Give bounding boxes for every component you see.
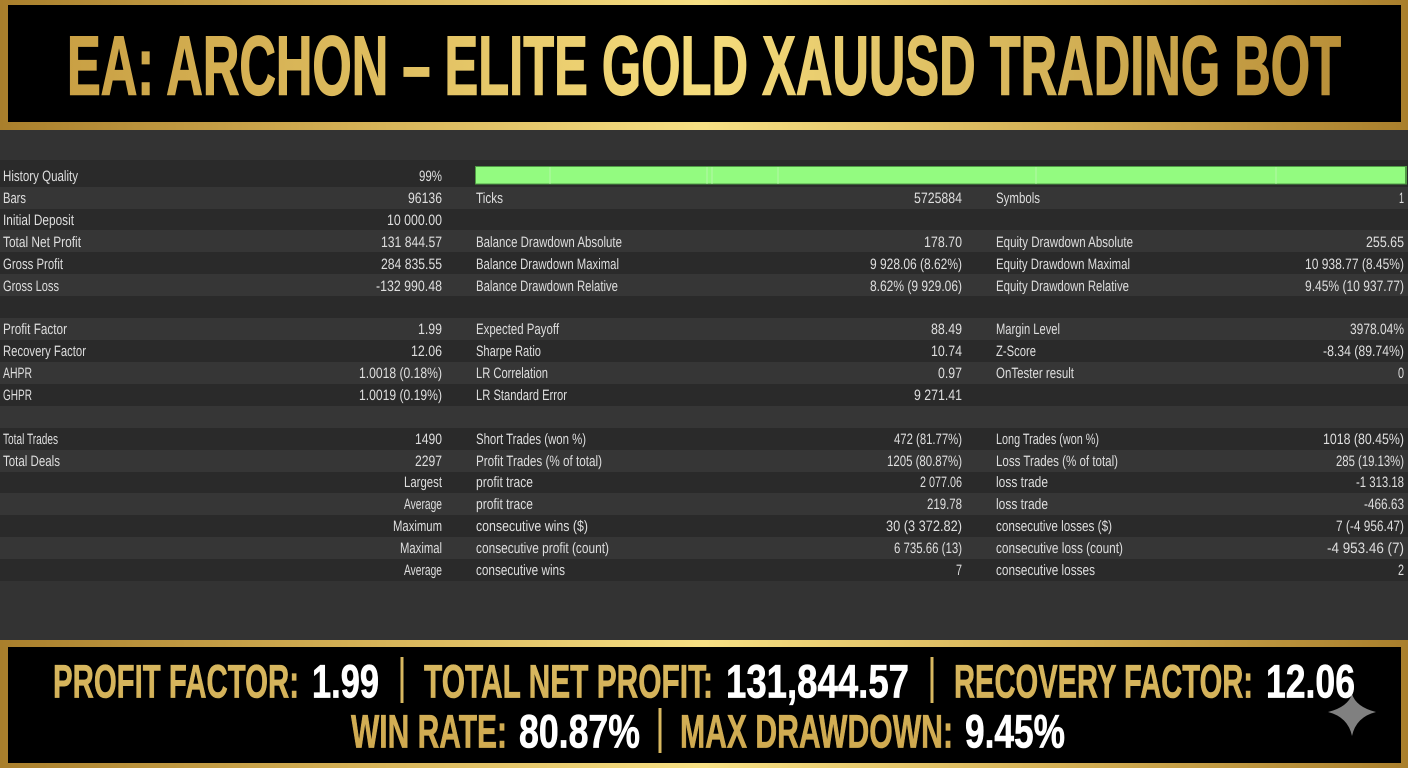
row: Total Net Profit [0, 230, 1408, 252]
footer metrics line 1 [53, 655, 1355, 708]
row: Profit Factor: 88.49 [931, 321, 962, 338]
row: Largest [0, 472, 1408, 493]
row: Maximum [0, 515, 1408, 537]
footer metrics line 1: TOTAL NET PROFIT: [424, 655, 713, 708]
row: AHPR: 0 [1398, 365, 1404, 382]
row: Bars [0, 187, 1408, 209]
row: Recovery Factor: Sharpe Ratio [476, 343, 541, 360]
footer metrics line 2: 80.87% [519, 705, 640, 758]
row: Gross Profit [0, 252, 1408, 274]
row: Largest: loss trade [996, 474, 1048, 491]
row: Average consecutive [0, 559, 1408, 581]
footer metrics line 1: 131,844.57 [726, 655, 909, 708]
row: GHPR: 9 271.41 [914, 387, 962, 404]
row: Average profit: Average [404, 496, 442, 513]
row: Total Trades: Short Trades (won %) [476, 431, 586, 448]
row: Gross Profit: 9 928.06 (8.62%) [870, 256, 962, 273]
row: AHPR: AHPR [3, 365, 32, 382]
row: Initial Deposit [0, 209, 1408, 230]
row: Largest: Largest [404, 474, 443, 491]
row: GHPR [0, 384, 1408, 406]
row: AHPR [0, 362, 1408, 384]
row: History Quality [0, 160, 1408, 187]
row: Bars: 5725884 [914, 190, 962, 207]
row: Bars: Symbols [996, 190, 1040, 207]
row: Initial Deposit: Initial Deposit [3, 212, 75, 229]
row: Maximal: Maximal [400, 540, 442, 557]
row: Total Net Profit: 131 844.57 [381, 234, 442, 251]
row: Total Trades: Total Trades [3, 431, 58, 448]
row: AHPR: 1.0018 (0.18%) [359, 365, 442, 382]
footer metrics line 1: 1.99 [312, 655, 379, 708]
row: Gross Profit: Balance Drawdown Maximal [476, 256, 619, 273]
row: Average consecutive: 7 [956, 562, 962, 579]
row: Total Deals [0, 450, 1408, 472]
row: Gross Profit: Equity Drawdown Maximal [996, 256, 1130, 273]
row: Average consecutive: consecutive losses [996, 562, 1095, 579]
row: Total Deals: 2297 [415, 453, 442, 470]
row: Maximal: 6 735.66 (13) [894, 540, 962, 557]
row: Gross Profit: 284 835.55 [381, 256, 442, 273]
row: GHPR: 1.0019 (0.19%) [359, 387, 442, 404]
row: Bars: 96136 [408, 190, 442, 207]
footer banner [0, 640, 1408, 768]
row: Recovery Factor: 12.06 [411, 343, 442, 360]
row: Bars: 1 [1399, 190, 1404, 207]
history quality bar [475, 166, 1407, 184]
footer metrics line 1: PROFIT FACTOR: [53, 655, 299, 708]
row: Average profit [0, 493, 1408, 515]
row: AHPR: 0.97 [938, 365, 962, 382]
row: Average profit: 219.78 [927, 496, 962, 513]
row: AHPR: LR Correlation [476, 365, 548, 382]
row: Maximal: consecutive profit (count) [476, 540, 609, 557]
footer metrics line 2 [351, 705, 1065, 758]
row: Total Trades: Long Trades (won %) [996, 431, 1099, 448]
row: Total Deals: Profit Trades (% of total) [476, 453, 602, 470]
statistics table [0, 160, 1408, 581]
row: Average consecutive: consecutive wins [476, 562, 565, 579]
row: Total Deals: Total Deals [3, 453, 60, 470]
row: Total Net Profit: 178.70 [924, 234, 962, 251]
row: GHPR: LR Standard Error [476, 387, 567, 404]
row: Profit Factor [0, 318, 1408, 340]
row: History Quality: 99% [419, 168, 442, 185]
row: Total Trades [0, 428, 1408, 450]
row: Average profit: profit trace [476, 496, 533, 513]
row: Initial Deposit: 10 000.00 [387, 212, 442, 229]
row: Total Net Profit: Total Net Profit [3, 234, 82, 251]
row: AHPR: OnTester result [996, 365, 1075, 382]
footer metrics line 2: WIN RATE: [351, 705, 507, 758]
row: Maximum: consecutive losses ($) [996, 518, 1112, 535]
header banner [0, 0, 1408, 130]
row: Maximal [0, 537, 1408, 559]
row: GHPR: GHPR [3, 387, 32, 404]
row: Gross Loss: -132 990.48 [376, 278, 442, 295]
row: Recovery Factor [0, 340, 1408, 362]
row: Largest: profit trace [476, 474, 533, 491]
row: Total Deals: Loss Trades (% of total) [996, 453, 1118, 470]
row: Maximal: consecutive loss (count) [996, 540, 1123, 557]
row: Average profit: loss trade [996, 496, 1048, 513]
row: Recovery Factor: Recovery Factor [3, 343, 86, 360]
row: Profit Factor: Profit Factor [3, 321, 67, 338]
row: Profit Factor: 1.99 [418, 321, 442, 338]
row: Gross Loss [0, 274, 1408, 296]
row: Bars: Bars [3, 190, 26, 207]
row: Recovery Factor: 10.74 [931, 343, 962, 360]
footer metrics line 1: 12.06 [1266, 655, 1355, 708]
row: History Quality: History Quality [3, 168, 78, 185]
row: Total Net Profit: Equity Drawdown Absolute [996, 234, 1133, 251]
row: Gross Loss: 8.62% (9 929.06) [870, 278, 962, 295]
row: Average consecutive: Average [404, 562, 442, 579]
footer metrics line 2: MAX DRAWDOWN: [680, 705, 953, 758]
row: Total Deals: 1205 (80.87%) [887, 453, 962, 470]
row: Total Trades: 1490 [415, 431, 442, 448]
row: Total Net Profit: Balance Drawdown Absolute [476, 234, 622, 251]
row: Bars: Ticks [476, 190, 503, 207]
row: Maximum: Maximum [393, 518, 442, 535]
row: Total Trades: 472 (81.77%) [894, 431, 962, 448]
footer metrics line 2: 9.45% [965, 705, 1065, 758]
row: Maximum: 30 (3 372.82) [886, 518, 962, 535]
row: Maximum: consecutive wins ($) [476, 518, 588, 535]
row: Profit Factor: Margin Level [996, 321, 1060, 338]
row: Profit Factor: Expected Payoff [476, 321, 560, 338]
row: Gross Loss: Balance Drawdown Relative [476, 278, 618, 295]
icon: sparkle watermark [1328, 694, 1376, 736]
row: Largest: 2 077.06 [920, 474, 962, 491]
row: Recovery Factor: Z-Score [996, 343, 1036, 360]
row: Gross Loss: Equity Drawdown Relative [996, 278, 1129, 295]
row: Average consecutive: 2 [1398, 562, 1404, 579]
row: Gross Profit: Gross Profit [3, 256, 64, 273]
row: Gross Loss: Gross Loss [3, 278, 59, 295]
